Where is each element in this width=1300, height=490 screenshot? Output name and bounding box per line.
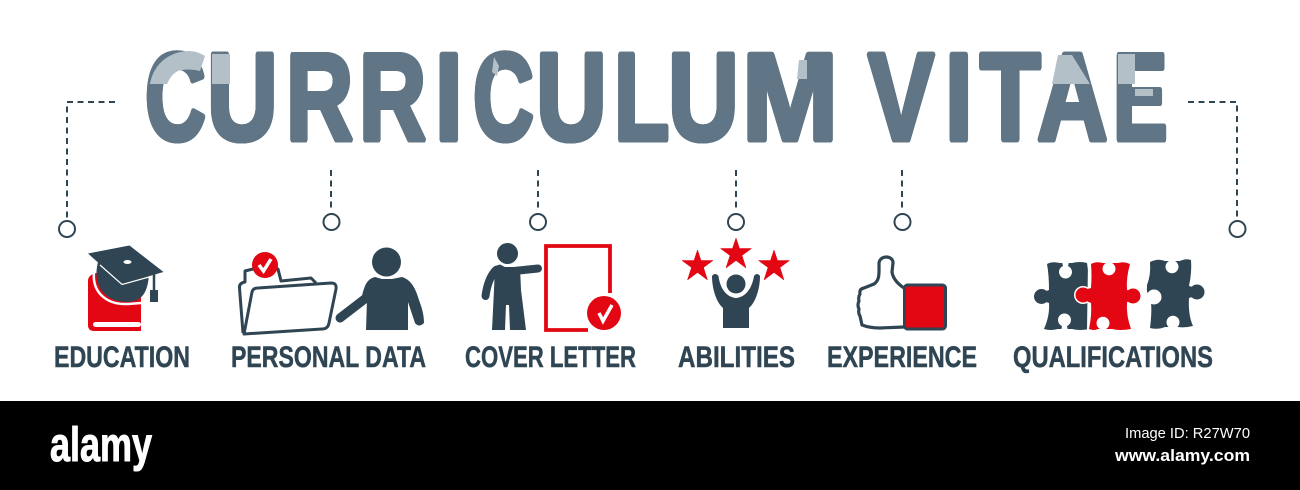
title: M xyxy=(742,28,838,166)
title: U xyxy=(668,28,739,166)
icon: thumbs up xyxy=(858,257,946,329)
title: U xyxy=(207,28,278,166)
title: I xyxy=(435,28,463,166)
title: C xyxy=(473,28,534,166)
footer bar xyxy=(0,401,1300,490)
connector: education xyxy=(59,102,115,237)
connector: personal data xyxy=(324,170,340,230)
title: R xyxy=(286,28,353,166)
title: A xyxy=(1037,28,1108,166)
title: U xyxy=(536,28,607,166)
label: experience: EXPERIENCE xyxy=(827,341,977,374)
title: V xyxy=(868,28,935,166)
icon: graduation cap on book xyxy=(88,246,164,331)
icon: folder and person xyxy=(239,248,424,334)
label: personal data: PERSONAL DATA xyxy=(231,341,426,374)
title: I xyxy=(945,28,972,166)
label: education: EDUCATION xyxy=(54,341,190,374)
title: E xyxy=(1113,28,1167,166)
connector: cover letter xyxy=(530,170,546,230)
label: cover letter: COVER LETTER xyxy=(465,341,636,374)
title: C xyxy=(145,28,206,166)
icon: stars and cheering person xyxy=(682,238,790,328)
icon: puzzle pieces xyxy=(1034,259,1204,331)
connector: abilities xyxy=(728,170,744,230)
connector: experience xyxy=(894,170,910,230)
watermark tint on title xyxy=(150,51,1153,96)
connector: qualifications xyxy=(1188,102,1246,237)
title xyxy=(145,28,1167,166)
label: abilities: ABILITIES xyxy=(678,341,795,374)
title: L xyxy=(614,28,670,166)
icon: person presenting cover letter xyxy=(486,243,621,330)
image id: Image ID: R27W70 xyxy=(1125,425,1250,442)
footer logo: alamy xyxy=(50,419,152,472)
title: R xyxy=(359,28,426,166)
website: www.alamy.com xyxy=(1114,447,1250,465)
title: T xyxy=(980,28,1040,166)
label: qualifications: QUALIFICATIONS xyxy=(1013,341,1213,374)
